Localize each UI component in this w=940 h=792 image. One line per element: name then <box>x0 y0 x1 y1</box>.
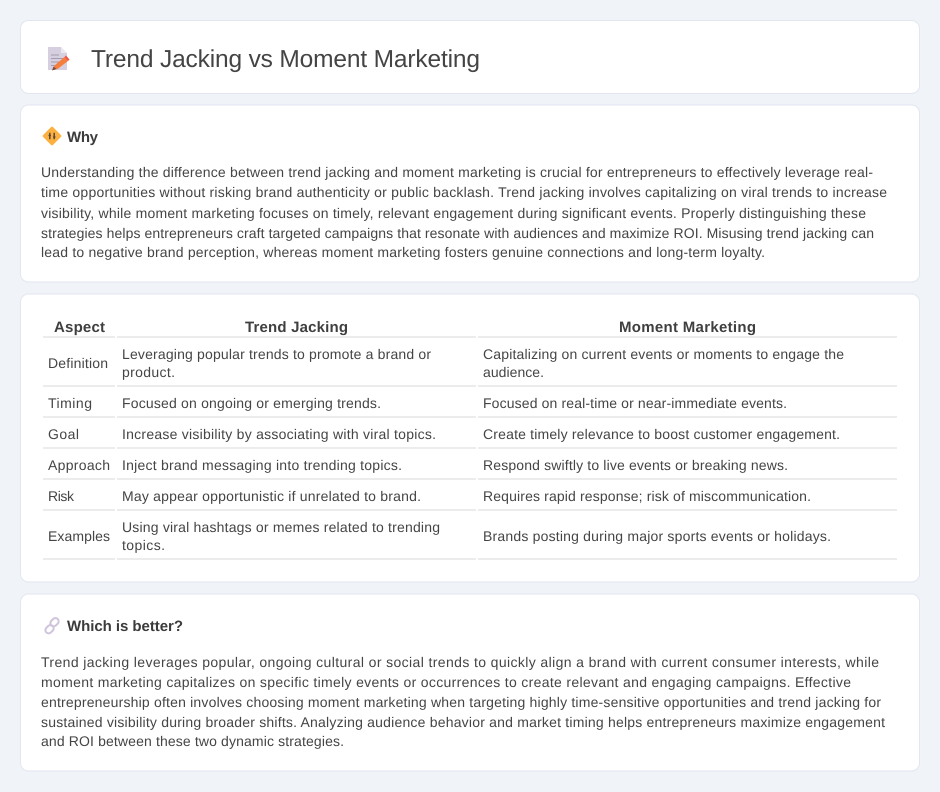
text block: which is better paragraph: sustained visibility during broader shifts. Analyzing audience behavior and market timing helps entrepreneurs maximize engagement <box>41 714 885 730</box>
table row: risk: Risk <box>48 488 75 504</box>
table row: timing: Timing <box>48 395 92 411</box>
panel: which is better <box>20 594 920 771</box>
title: Trend Jacking vs Moment Marketing <box>91 46 480 73</box>
table header row: Aspect <box>54 319 105 336</box>
table row: goal: Increase visibility by associating with viral topics. <box>122 426 436 442</box>
table row: definition <box>48 346 844 380</box>
table row: timing: Focused on ongoing or emerging trends. <box>122 395 381 411</box>
table row: examples: Examples <box>48 528 110 544</box>
table row: examples: Brands posting during major sports events or holidays. <box>483 528 831 544</box>
text block: why paragraph: lead to negative brand perception, whereas moment marketing fosters genuine connections and long-term loyalty. <box>41 244 765 260</box>
icon: chain link <box>44 617 60 635</box>
table header row <box>54 319 756 336</box>
text block: which is better paragraph: moment marketing capitalizes on specific timely events or occurrences to create relevant and engaging campaigns. Effective <box>41 674 851 690</box>
table row: approach: Respond swiftly to live events or breaking news. <box>483 457 788 473</box>
table row: examples <box>48 519 831 553</box>
table row: goal <box>48 426 840 442</box>
text block: why paragraph: visibility, while moment marketing focuses on timely, relevant engagement during significant events. Properly distinguishing these <box>41 205 866 221</box>
text block: why paragraph: time opportunities without risking brand authenticity or public backlash. Trend jacking involves capitalizing on viral trends to increase <box>41 184 887 200</box>
table row: goal: Create timely relevance to boost customer engagement. <box>483 426 840 442</box>
table row: definition: Leveraging popular trends to promote a brand or <box>122 346 431 362</box>
panel: title header <box>20 20 920 94</box>
table row: approach <box>48 457 788 473</box>
table header row: Moment Marketing <box>619 319 756 336</box>
table header row: Trend Jacking <box>245 319 348 336</box>
table row: approach: Inject brand messaging into trending topics. <box>122 457 402 473</box>
table row: timing: Focused on real-time or near-immediate events. <box>483 395 787 411</box>
icon: orange diamond sign <box>42 126 62 146</box>
table row: definition: Definition <box>48 355 108 371</box>
heading: which is better: Which is better? <box>67 618 183 635</box>
heading: why: Why <box>67 129 99 146</box>
table row: risk <box>48 488 811 504</box>
text block: which is better paragraph: Trend jacking leverages popular, ongoing cultural or social trends to quickly align a brand with current consumer interests, while <box>41 654 879 670</box>
text block: why paragraph <box>41 164 887 260</box>
text block: which is better paragraph: and ROI between these two dynamic strategies. <box>41 733 344 749</box>
table row: risk: May appear opportunistic if unrelated to brand. <box>122 488 421 504</box>
text block: why paragraph: strategies helps entrepreneurs craft targeted campaigns that resonate with audiences and maximize ROI. Misusing trend jacking can <box>41 225 874 241</box>
text block: which is better paragraph <box>41 654 885 749</box>
panel: why <box>20 105 920 282</box>
icon: document with pencil <box>48 47 70 70</box>
panel: comparison table <box>20 294 920 582</box>
table row: timing <box>48 395 787 411</box>
text block: which is better paragraph: entrepreneurship often involves choosing moment marketing when targeting highly time-sensitive opportunities and trend jacking for <box>41 694 881 710</box>
table row: approach: Approach <box>48 457 110 473</box>
table row: definition: product. <box>122 364 175 380</box>
table row: examples: topics. <box>122 537 165 553</box>
table row: examples: Using viral hashtags or memes related to trending <box>122 519 440 535</box>
table row: definition: Capitalizing on current events or moments to engage the <box>483 346 844 362</box>
table row: risk: Requires rapid response; risk of miscommunication. <box>483 488 811 504</box>
table row: goal: Goal <box>48 426 79 442</box>
table row: definition: audience. <box>483 364 544 380</box>
text block: why paragraph: Understanding the difference between trend jacking and moment marketing is crucial for entrepreneurs to effectively leverage real- <box>41 164 873 180</box>
